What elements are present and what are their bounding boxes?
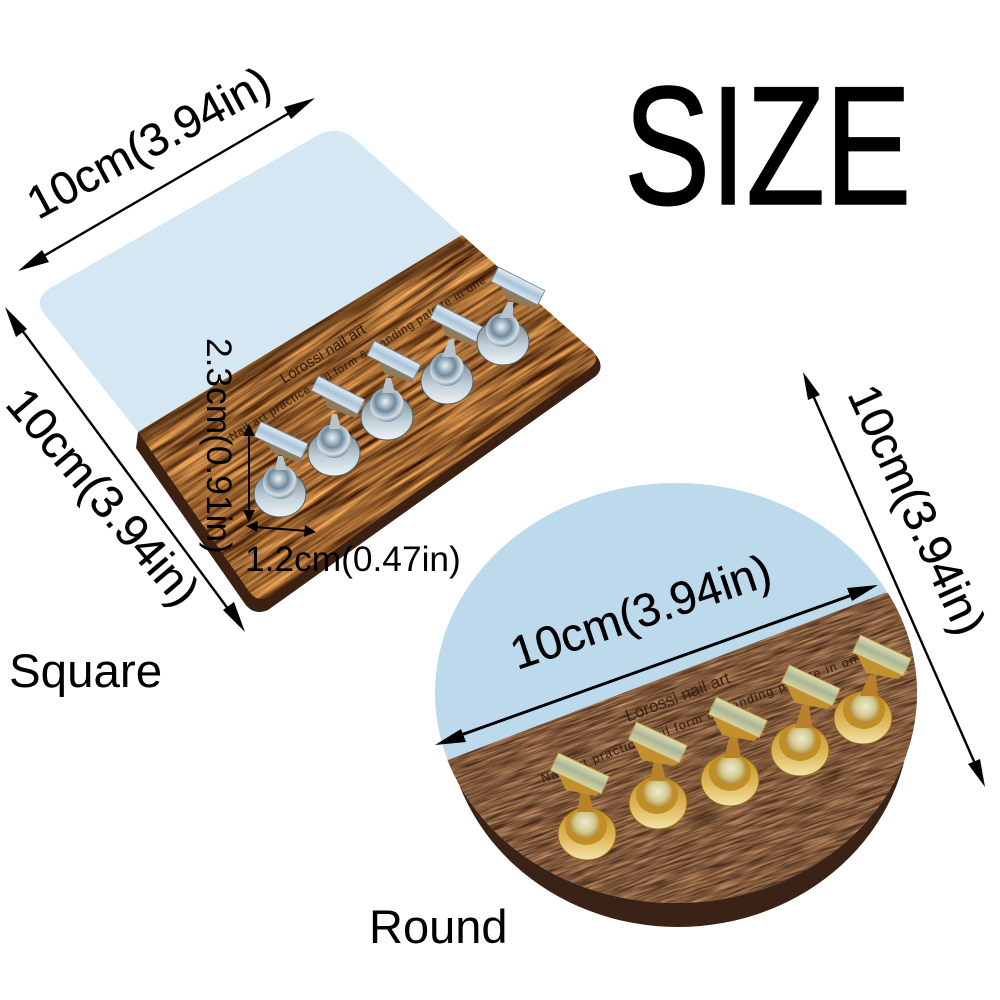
arrow: square left depth <box>5 307 245 632</box>
silver stand 3 <box>361 341 421 440</box>
label: round diameter: 10cm(3.94in) <box>504 544 778 679</box>
arrow: round diameter <box>435 585 878 745</box>
arrow: round side diameter <box>803 372 985 787</box>
round board edge <box>459 759 905 927</box>
silver stand 2 <box>308 376 365 476</box>
panel: square board <box>40 130 601 612</box>
label: square left depth: 10cm(3.94in) <box>0 378 210 616</box>
engraved description text: Nail art practice nail form & standing palette in one <box>227 274 488 444</box>
arrow: stand height <box>243 424 255 522</box>
square board marble top <box>40 131 462 432</box>
square board wood top <box>138 235 596 599</box>
gold stand 4 <box>771 665 840 776</box>
square board edge <box>136 350 601 612</box>
label: Round: Round <box>369 900 508 953</box>
engraved brand text round: Lorossi nail art <box>623 668 733 726</box>
gold stand 5 <box>834 635 911 744</box>
arrow: square top width <box>18 98 315 271</box>
engraved brand text: Lorossi nail art <box>277 321 370 387</box>
label: stand height: 2.3cm(0.91in) <box>199 338 238 554</box>
label: Square: Square <box>9 645 162 698</box>
title: SIZE: SIZE <box>624 51 911 240</box>
label: square top width: 10cm(3.94in) <box>18 56 279 229</box>
round board wood top <box>448 593 917 903</box>
arrow: stand width <box>246 521 316 537</box>
label: round side diameter: 10cm(3.94in) <box>838 377 997 642</box>
gold stand 2 <box>628 722 687 829</box>
panel: round board <box>435 483 917 927</box>
silver stand 1 <box>254 422 308 517</box>
silver stand 4 <box>421 304 484 404</box>
round board marble top <box>435 483 917 903</box>
engraved description text round: Nail art practice nail form & standing palette in one <box>539 649 866 786</box>
gold stand 3 <box>701 697 767 806</box>
gold stand 1 <box>550 753 616 860</box>
label: stand width: 1.2cm(0.47in) <box>245 540 461 579</box>
silver stand 5 <box>477 267 545 365</box>
